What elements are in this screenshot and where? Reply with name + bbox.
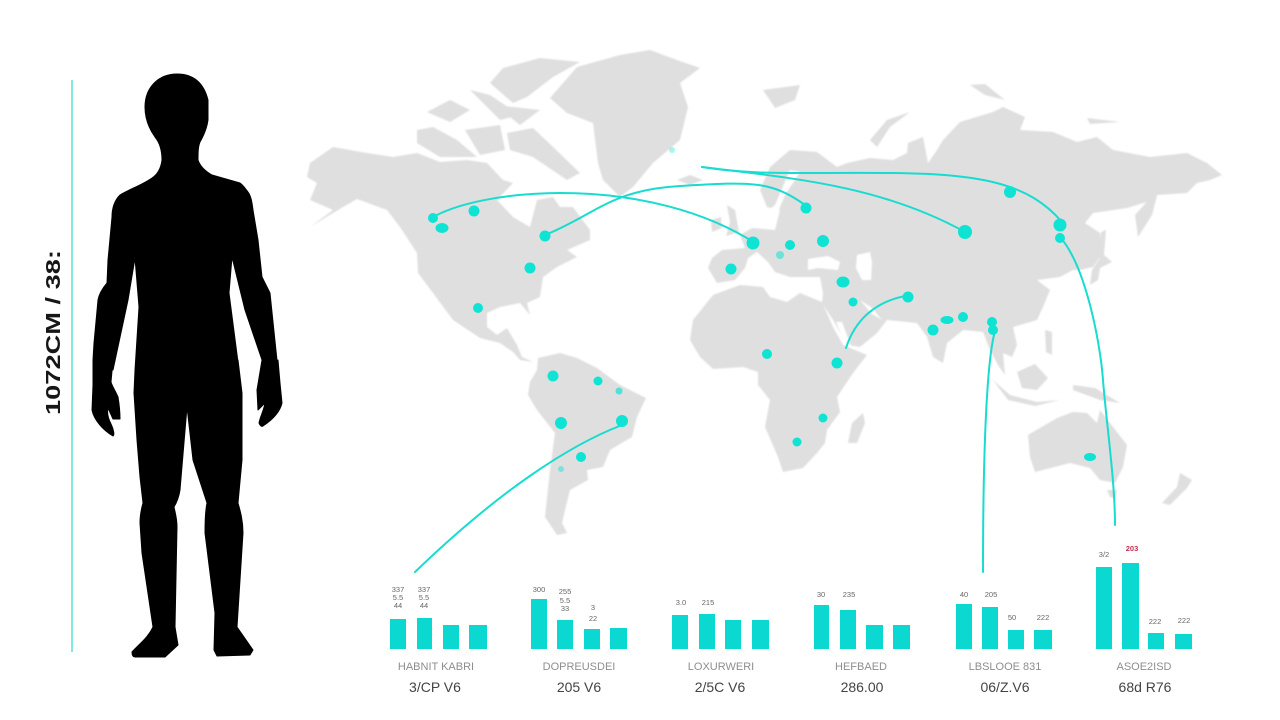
- Australia: [1028, 410, 1127, 483]
- bar chart one: 44: [420, 601, 428, 610]
- bar chart two: 255: [559, 587, 571, 596]
- bar chart two: 3: [591, 603, 595, 612]
- inland seas: [762, 170, 882, 346]
- Southeast Asia and Indonesia: [993, 330, 1120, 406]
- bar chart two: 22: [589, 614, 597, 623]
- human silhouette: [92, 74, 282, 657]
- Japan: [1090, 230, 1112, 285]
- South America: [528, 353, 646, 535]
- bar chart five: 50: [1008, 613, 1016, 622]
- Arctic islands: [417, 58, 580, 180]
- Eurasia: [708, 107, 1222, 375]
- connection arcs: [415, 167, 1115, 572]
- bar chart one: 337: [392, 585, 404, 594]
- Russian Arctic islands: [763, 84, 1120, 147]
- world map: [307, 50, 1222, 535]
- bar chart one: HABNIT KABRI: [398, 661, 474, 673]
- Sakhalin: [1135, 196, 1157, 237]
- bar chart six: 68d R76: [1119, 679, 1172, 695]
- Madagascar: [848, 413, 865, 443]
- bar chart five: 40: [960, 590, 968, 599]
- bar chart six: 222: [1149, 617, 1161, 626]
- bar chart one: 5.5: [393, 593, 403, 602]
- Africa: [690, 285, 867, 472]
- bar chart six: 3/2: [1099, 550, 1109, 559]
- bar chart one: 337: [418, 585, 430, 594]
- arc: eastern Canada to northern Europe: [545, 184, 805, 235]
- bar chart three: 2/5C V6: [695, 679, 746, 695]
- bar chart two: 205 V6: [557, 679, 601, 695]
- bar chart five: 06/Z.V6: [980, 679, 1030, 695]
- bar chart six: 203: [1126, 544, 1138, 553]
- bar chart five: LBSLOOE 831: [969, 661, 1041, 673]
- bar chart two: 5.5: [560, 596, 570, 605]
- North America: [307, 147, 590, 362]
- arc: Atlantic to central Russia: [702, 167, 965, 232]
- bar chart three: 215: [702, 598, 714, 607]
- arc: Brazil to bar chart one: [415, 425, 622, 572]
- bar chart two: DOPREUSDEI: [543, 661, 615, 673]
- bar chart one: 5.5: [419, 593, 429, 602]
- bar chart four: HEFBAED: [835, 661, 887, 673]
- location dots: [428, 147, 1096, 472]
- height label: 1072CM / 38:: [43, 250, 65, 415]
- arc: Southeast Asia to bar chart five: [983, 335, 994, 572]
- arc: East Asia to bar chart six: [1060, 237, 1115, 525]
- height scale line: [71, 80, 73, 652]
- bar chart two: 33: [561, 604, 569, 613]
- bar chart one: 3/CP V6: [409, 679, 461, 695]
- arc: Atlantic to eastern Russia: [702, 167, 1062, 222]
- bar chart three: 3.0: [676, 598, 686, 607]
- bar chart five: 222: [1037, 613, 1049, 622]
- New Zealand: [1162, 473, 1192, 505]
- bar chart four: 286.00: [841, 679, 884, 695]
- bar chart six: ASOE2ISD: [1116, 661, 1172, 673]
- British Isles: [711, 205, 739, 236]
- bar chart one: 44: [394, 601, 402, 610]
- bar chart two: [531, 585, 627, 695]
- bar chart five: [956, 590, 1052, 695]
- bar chart three: [672, 598, 769, 695]
- bar chart six: 222: [1178, 616, 1190, 625]
- Iceland: [677, 175, 703, 185]
- bar chart two: 300: [533, 585, 545, 594]
- arc: Horn of Africa to Central Asia: [846, 296, 905, 348]
- bar chart three: LOXURWERI: [688, 661, 754, 673]
- bar chart one: [390, 585, 487, 695]
- bar chart four: 235: [843, 590, 855, 599]
- bar chart four: 30: [817, 590, 825, 599]
- arc: North America to Europe: [433, 193, 755, 243]
- Greenland: [550, 50, 700, 197]
- Tasmania: [1107, 490, 1117, 498]
- bar chart six: [1096, 544, 1192, 695]
- bar chart five: 205: [985, 590, 997, 599]
- bar chart four: [814, 590, 910, 695]
